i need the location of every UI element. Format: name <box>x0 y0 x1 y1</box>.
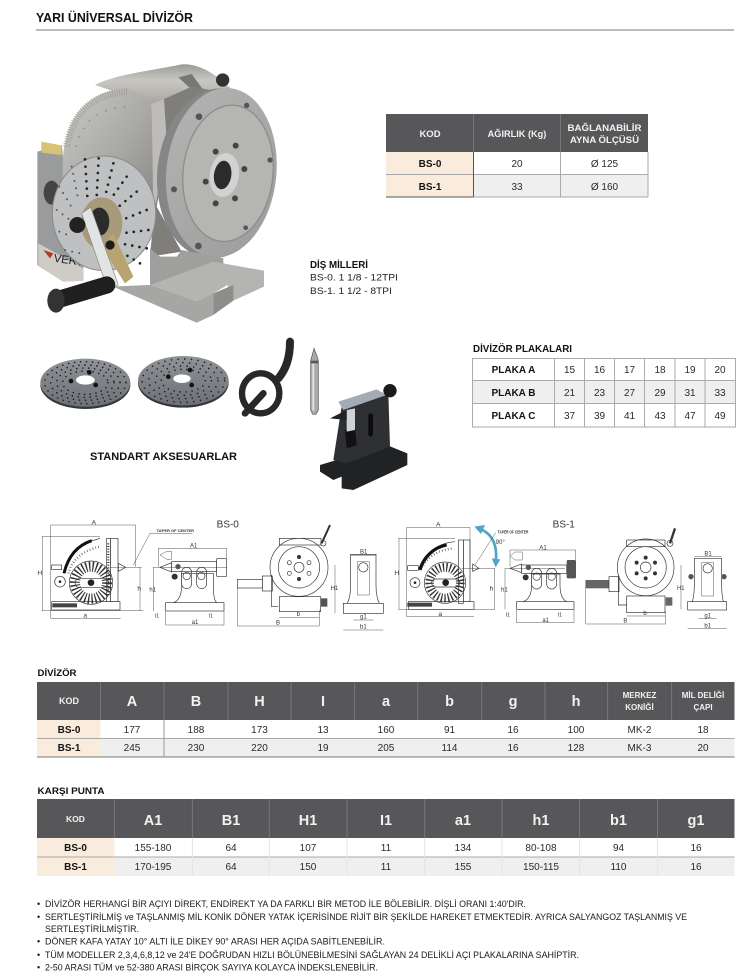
table: divider dimensions: 91 <box>444 725 455 736</box>
table: weights and chuck sizes <box>386 114 648 197</box>
table: divider dimensions: 100 <box>568 725 585 736</box>
end elevation: B <box>276 621 280 627</box>
table: divider dimensions: 114 <box>442 743 458 754</box>
table: tailstock dimensions: A1 <box>144 813 162 829</box>
table: divider dimensions: MK-2 <box>628 725 652 736</box>
text block: feature list: SERTLEŞTİRİLMİŞ ve TAŞLANMIŞ MİL KONİK DÖNER YATAK İÇERİSİNDE RİJİT BİR ŞEKİLDE HAREKET ETMEKTEDİR. AYRICA SALYANGOZ TAŞLANMIŞ VE <box>45 912 687 922</box>
front elevation: H <box>394 570 399 577</box>
table: divider dimensions: A <box>127 694 138 710</box>
technical drawing: BS-1 <box>394 519 727 629</box>
text block: feature list: DİVİZÖR HERHANGİ BİR AÇIYI DİREKT, ENDİREKT YA DA FARKLI BİR METOD İLE BÖLEBİLİR. DİŞLİ ORANI 1:40'DIR. <box>45 899 526 909</box>
table: divider dimensions: a <box>382 694 391 710</box>
table: tailstock dimensions: B1 <box>222 813 240 829</box>
text block: feature list: DÖNER KAFA YATAY 10° ALTI İLE DİKEY 90° ARASI HER AÇIDA SABİTLENEBİLİR. <box>45 936 385 946</box>
table: tailstock dimensions: 134 <box>455 843 472 854</box>
icon: tailstock <box>320 384 407 490</box>
side elevation <box>331 549 383 631</box>
side elevation: H1 <box>677 586 685 592</box>
table: divider plates: 18 <box>654 365 666 376</box>
table: divider plates: 31 <box>684 388 696 399</box>
table: divider plates: 29 <box>654 388 666 399</box>
table: divider dimensions: 173 <box>251 725 268 736</box>
table: tailstock dimensions: 155-180 <box>135 843 172 854</box>
icon: live center <box>311 348 318 414</box>
text block: spindle threads: BS-1. 1 1/2 - 8TPI <box>310 286 392 297</box>
table: divider plates: 33 <box>714 388 726 399</box>
table: tailstock dimensions: 150 <box>300 862 317 873</box>
table: divider plates: 41 <box>624 411 635 422</box>
front elevation: A <box>436 521 441 528</box>
tailstock elevation: h1 <box>501 587 508 593</box>
rear cylinder <box>95 64 231 104</box>
table: weights and chuck sizes: Ø 160 <box>591 182 619 193</box>
table: divider dimensions: 16 <box>507 743 519 754</box>
table: divider dimensions: g <box>509 694 517 710</box>
table: weights and chuck sizes: BAĞLANABİLİR <box>568 122 642 133</box>
table: tailstock dimensions: g1 <box>688 813 704 829</box>
table: tailstock dimensions: 110 <box>611 862 627 873</box>
label: BS-1: BS-1 <box>553 519 575 530</box>
table: divider dimensions: 245 <box>124 743 141 754</box>
index plate <box>52 156 156 271</box>
table: tailstock dimensions: KOD <box>66 814 85 824</box>
table: divider plates: 16 <box>594 365 605 376</box>
table: divider dimensions: I <box>321 694 325 710</box>
table: divider dimensions: 230 <box>188 743 205 754</box>
locking knob <box>178 73 229 93</box>
table: divider plates: 37 <box>564 411 575 422</box>
table: divider dimensions: 18 <box>697 725 709 736</box>
table: tailstock dimensions: 80-108 <box>525 843 557 854</box>
text block: feature list <box>37 899 687 972</box>
table: divider dimensions <box>37 682 734 757</box>
front elevation: A <box>92 520 97 527</box>
table: weights and chuck sizes: KOD <box>419 129 441 140</box>
table: tailstock dimensions: BS-0 <box>64 843 87 854</box>
table: divider plates: 49 <box>714 411 726 422</box>
table: weights and chuck sizes: BS-1 <box>419 182 442 193</box>
front elevation: h <box>137 586 141 593</box>
text block: spindle threads: BS-0. 1 1/8 - 12TPI <box>310 272 398 284</box>
table: divider plates: 19 <box>684 365 696 376</box>
table: divider dimensions: MİL DELİĞİ <box>682 691 724 700</box>
faceplate <box>149 82 285 264</box>
end elevation: B <box>623 619 627 625</box>
tailstock elevation: I1 <box>558 613 562 619</box>
table: tailstock dimensions: 16 <box>690 843 702 854</box>
table: tailstock dimensions: H1 <box>299 813 317 829</box>
table: divider plates: 20 <box>714 365 726 376</box>
table: weights and chuck sizes: AĞIRLIK (Kg) <box>488 128 546 139</box>
head body block <box>150 87 213 257</box>
side plate with brass strip <box>37 142 92 282</box>
table: tailstock dimensions: 11 <box>381 843 392 854</box>
text block: feature list: • <box>37 950 40 960</box>
table: divider plates: PLAKA B <box>491 388 536 399</box>
text block: feature list: • <box>37 912 40 922</box>
table: divider plates <box>472 358 736 427</box>
tailstock elevation: h1 <box>149 588 157 594</box>
side elevation: H1 <box>331 586 339 592</box>
table: divider dimensions: ÇAPI <box>693 703 713 712</box>
table: tailstock dimensions: 16 <box>690 862 702 873</box>
front elevation <box>37 520 143 619</box>
text block: feature list: SERTLEŞTİRİLMİŞTİR. <box>45 924 139 934</box>
table: divider plates: 47 <box>684 411 696 422</box>
heading: tailstock table: KARŞI PUNTA <box>38 786 105 797</box>
title: YARI ÜNİVERSAL DİVİZÖR <box>36 10 193 25</box>
front elevation: H <box>37 570 42 577</box>
callout: taper of center: TAPER OF CENTER <box>157 528 194 533</box>
crank handle with brass hub <box>47 197 133 313</box>
technical drawing: BS-0 <box>37 519 383 631</box>
table: divider plates: 21 <box>564 388 575 399</box>
table: tailstock dimensions: 64 <box>225 843 237 854</box>
text block: feature list: 2-50 ARASI TÜM ve 52-380 ARASI BİRÇOK SAYIYA KOLAYCA İNDEKSLENEBİLİR. <box>45 962 378 972</box>
table: divider dimensions: KONİĞİ <box>625 703 654 712</box>
table: tailstock dimensions: 107 <box>300 843 317 854</box>
tailstock elevation: a1 <box>542 618 550 624</box>
callout: taper of center and 90 degrees: 90° <box>496 540 505 546</box>
table: weights and chuck sizes: 33 <box>511 182 523 193</box>
end elevation <box>586 528 675 625</box>
side elevation: B1 <box>704 552 712 558</box>
table: divider dimensions: 160 <box>378 725 395 736</box>
table: divider plates: PLAKA C <box>491 411 536 422</box>
text block: spindle threads: DİŞ MİLLERİ <box>310 258 368 271</box>
table: weights and chuck sizes: AYNA ÖLÇÜSÜ <box>570 135 639 145</box>
side elevation: B1 <box>360 549 368 555</box>
table: divider dimensions: h <box>572 694 580 710</box>
table: divider dimensions: 13 <box>317 725 329 736</box>
table: tailstock dimensions: 170-195 <box>135 862 172 873</box>
table: divider dimensions: 19 <box>317 743 329 754</box>
photo: semi-universal dividing head <box>37 64 285 323</box>
end elevation: b <box>643 611 647 617</box>
table: tailstock dimensions: h1 <box>533 813 549 829</box>
table: weights and chuck sizes: Ø 125 <box>591 159 619 170</box>
label: BS-0: BS-0 <box>217 519 239 530</box>
table: tailstock dimensions: 94 <box>613 843 624 854</box>
table: tailstock dimensions: b1 <box>610 813 627 829</box>
tailstock elevation: I1 <box>209 613 213 619</box>
heading: divider plates: DİVİZÖR PLAKALARI <box>473 342 572 355</box>
table: divider dimensions: 128 <box>568 743 585 754</box>
table: divider dimensions: 16 <box>507 725 519 736</box>
table: tailstock dimensions: 11 <box>381 862 392 873</box>
front elevation: h <box>490 586 494 593</box>
table: divider dimensions: b <box>445 694 454 710</box>
side elevation: b1 <box>704 623 712 629</box>
side elevation <box>677 552 727 629</box>
callout: taper of center and 90 degrees: TAPER OF CENTER <box>498 529 529 534</box>
end elevation <box>237 525 330 627</box>
table: tailstock dimensions: 150-115 <box>523 862 559 873</box>
front elevation: a <box>438 611 442 618</box>
table: divider dimensions: 177 <box>124 725 141 736</box>
table: tailstock dimensions: BS-1 <box>64 862 87 873</box>
tailstock elevation: A1 <box>190 543 198 549</box>
callout: taper of center and 90 degrees <box>475 529 529 565</box>
callout: taper of center <box>133 528 194 565</box>
arrow: 90 degree rotation <box>474 525 500 567</box>
icon: index plate 2 <box>138 356 229 408</box>
table: tailstock dimensions <box>37 799 734 876</box>
table: divider dimensions: MK-3 <box>628 743 652 754</box>
text block: feature list: • <box>37 936 40 946</box>
heading: standard accessories: STANDART AKSESUARLAR <box>90 451 237 463</box>
front elevation <box>394 521 495 618</box>
table: weights and chuck sizes: BS-0 <box>419 159 442 170</box>
panel: standard accessories <box>40 342 407 490</box>
end elevation: b <box>297 612 301 618</box>
table: divider dimensions: MERKEZ <box>623 691 656 700</box>
front elevation: a <box>83 612 87 619</box>
table: divider dimensions: 188 <box>188 725 205 736</box>
tailstock elevation: I1 <box>155 613 159 619</box>
icon: carrier wrench <box>242 342 290 413</box>
side elevation: g1 <box>360 615 367 621</box>
table: divider plates: 23 <box>594 388 605 399</box>
table: divider dimensions: H <box>254 694 265 710</box>
side plate with brass strip: VERTE <box>53 253 92 270</box>
text block: spindle threads <box>310 258 398 297</box>
tailstock elevation: A1 <box>539 545 547 551</box>
table: divider plates: 17 <box>624 365 635 376</box>
angle scale dial <box>63 88 157 213</box>
side elevation: g1 <box>704 613 712 619</box>
tailstock elevation: I1 <box>506 613 510 619</box>
table: divider plates: 15 <box>564 365 575 376</box>
table: divider dimensions: BS-0 <box>58 725 81 736</box>
tailstock elevation: a1 <box>192 620 199 626</box>
table: divider plates: 43 <box>654 411 666 422</box>
text block: feature list: • <box>37 899 40 909</box>
table: divider dimensions: BS-1 <box>58 743 81 754</box>
tailstock elevation <box>501 545 576 624</box>
table: divider dimensions: 220 <box>251 743 268 754</box>
table: divider dimensions: 20 <box>697 743 709 754</box>
table: tailstock dimensions: 64 <box>225 862 237 873</box>
table: divider dimensions: B <box>191 694 201 710</box>
table: divider plates: 39 <box>594 411 605 422</box>
base with T-slots <box>113 248 264 323</box>
side elevation: b1 <box>360 625 367 631</box>
text block: feature list: TÜM MODELLER 2,3,4,6,8,12 ve 24'E DOĞRUDAN HIZLI BÖLÜNEBİLMESİNİ SAĞLAYAN 24 DELİKLİ AÇI PLAKALARINA SAHİPTİR. <box>45 950 579 960</box>
icon: index plate 1 <box>40 359 130 409</box>
table: tailstock dimensions: I1 <box>380 813 392 829</box>
table: divider dimensions: 205 <box>378 743 395 754</box>
table: divider plates: PLAKA A <box>492 365 535 376</box>
table: divider dimensions: KOD <box>59 696 80 706</box>
tailstock elevation <box>149 543 227 626</box>
table: weights and chuck sizes: 20 <box>511 159 523 170</box>
table: tailstock dimensions: a1 <box>455 813 471 829</box>
text block: feature list: • <box>37 962 40 972</box>
table: tailstock dimensions: 155 <box>455 862 472 873</box>
heading: divider table: DİVİZÖR <box>38 668 77 679</box>
table: divider plates: 27 <box>624 388 635 399</box>
